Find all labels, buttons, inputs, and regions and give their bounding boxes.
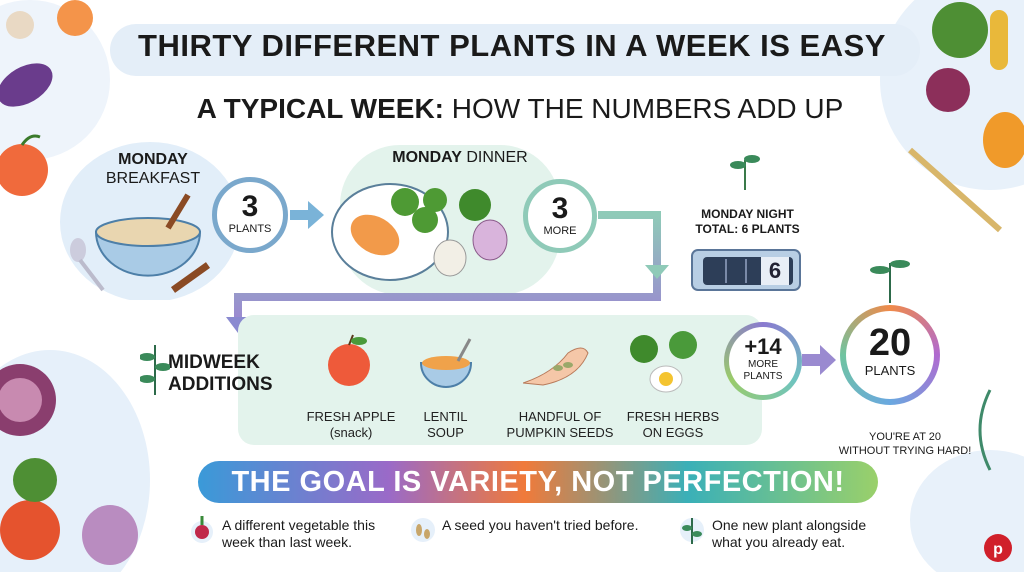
- tips row: [191, 516, 866, 550]
- tip 3: what you already eat.: [712, 534, 845, 550]
- icon: seeds hand: [523, 348, 588, 386]
- panel: midweek additions: LENTIL: [423, 409, 468, 424]
- panel: midweek additions: SOUP: [427, 425, 464, 440]
- circle: 3 more: [523, 179, 597, 253]
- heading: midweek additions: [168, 352, 272, 395]
- tip 1: week than last week.: [222, 534, 352, 550]
- circle: +14 more plants: MORE: [748, 359, 778, 370]
- heading: monday breakfast: BREAKFAST: [106, 170, 200, 187]
- panel: midweek additions: PUMPKIN SEEDS: [507, 425, 613, 440]
- tip 2: [411, 517, 638, 542]
- caption: YOU'RE AT 20: [869, 431, 941, 443]
- circle: 3 more: 3: [552, 192, 568, 225]
- corner decorations: p: [993, 541, 1003, 558]
- circle: 3 more: MORE: [544, 225, 576, 237]
- arrow: flow path: [226, 211, 669, 333]
- tip 3: [680, 517, 866, 550]
- panel: midweek additions: [238, 315, 762, 445]
- circle: +14 more plants: [724, 322, 802, 400]
- icon: sprout top: [870, 260, 910, 303]
- monday night total: [691, 155, 801, 291]
- circle: +14 more plants: +14: [744, 334, 782, 359]
- icon: sprout: [140, 345, 170, 395]
- panel: midweek additions: ON EGGS: [643, 425, 703, 440]
- circle: +14 more plants: PLANTS: [744, 371, 782, 382]
- title: THIRTY DIFFERENT PLANTS IN A WEEK IS EASY: [138, 28, 886, 63]
- circle: 20 plants: 20: [869, 322, 911, 364]
- icon: herbs and egg: [630, 331, 697, 392]
- caption: WITHOUT TRYING HARD!: [839, 445, 971, 457]
- panel: midweek additions: FRESH HERBS: [627, 409, 719, 424]
- tip 3: One new plant alongside: [712, 517, 866, 533]
- monday night total: TOTAL: 6 PLANTS: [695, 222, 800, 236]
- tip 1: [191, 516, 375, 550]
- monday night total: MONDAY NIGHT: [701, 207, 794, 221]
- panel: midweek additions: HANDFUL OF: [519, 409, 601, 424]
- circle: 3 plants: [212, 177, 288, 253]
- panel: midweek additions: FRESH APPLE: [307, 409, 395, 424]
- heading: monday breakfast: [106, 151, 200, 187]
- heading: midweek additions: ADDITIONS: [168, 374, 272, 395]
- banner: [198, 461, 878, 503]
- banner: THE GOAL IS VARIETY, NOT PERFECTION!: [231, 466, 845, 498]
- circle: 3 plants: 3: [242, 190, 258, 223]
- counter: [691, 249, 801, 291]
- panel: breakfast: [60, 142, 234, 300]
- icon: soup: [420, 338, 472, 388]
- icon: apple: [328, 334, 370, 386]
- arrow: [802, 345, 836, 375]
- panel: midweek additions: (snack): [330, 425, 372, 440]
- circle: 20 plants: PLANTS: [865, 363, 915, 378]
- subtitle: A TYPICAL WEEK: HOW THE NUMBERS ADD UP: [197, 93, 843, 124]
- counter: 6: [769, 258, 781, 283]
- circle: 3 plants: PLANTS: [229, 223, 271, 235]
- circle: 20 plants: [840, 305, 940, 405]
- panel: dinner: [331, 145, 557, 293]
- tip 1: A different vegetable this: [222, 517, 375, 533]
- tip 2: A seed you haven't tried before.: [442, 517, 638, 533]
- arrow: [290, 201, 324, 229]
- caption: [838, 431, 971, 457]
- heading: midweek additions: MIDWEEK: [168, 352, 260, 373]
- heading: monday dinner: MONDAY DINNER: [392, 149, 528, 166]
- heading: monday breakfast: MONDAY: [118, 151, 188, 168]
